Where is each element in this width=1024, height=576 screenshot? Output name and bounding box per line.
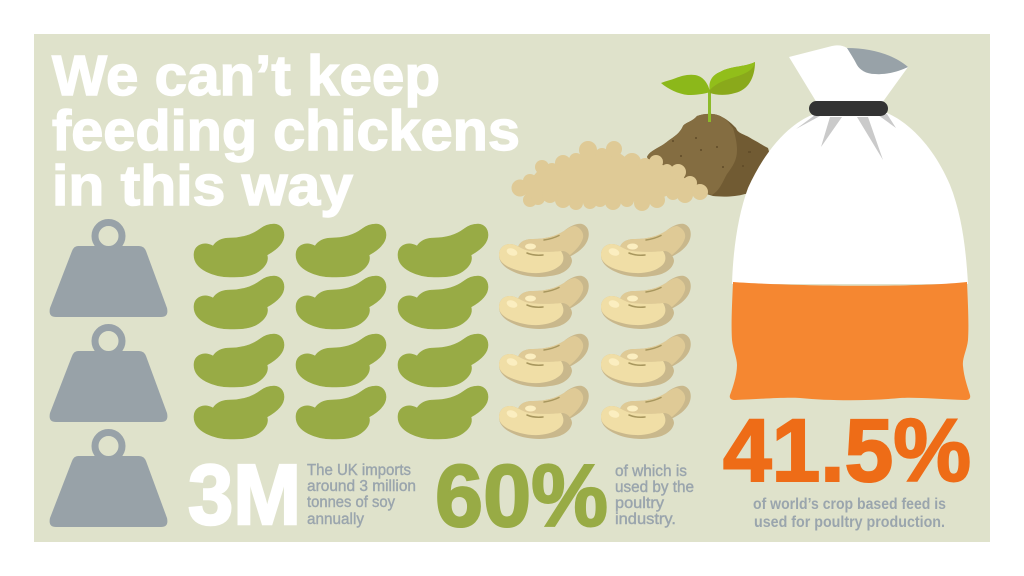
- title: in this way: [52, 154, 353, 218]
- icon: feed sack: [730, 45, 970, 400]
- text: poultry industry share: of which is: [615, 463, 687, 480]
- title: We can’t keep: [52, 44, 440, 108]
- text: poultry industry share: used by the: [615, 479, 694, 496]
- text: UK imports: tonnes of soy: [307, 494, 395, 511]
- sack tie: [809, 101, 888, 116]
- icon grid: pale soybeans: [499, 224, 691, 439]
- sack top: [789, 45, 908, 103]
- text: UK imports: around 3 million: [307, 478, 416, 495]
- weight 3: [50, 432, 167, 527]
- weight 2: [50, 328, 167, 422]
- title: [52, 44, 520, 218]
- sack fill level orange: [730, 282, 970, 400]
- text: world crop based feed: [753, 496, 946, 531]
- text: world crop based feed: of world’s crop based feed is: [753, 496, 946, 513]
- title: feeding chickens: [52, 99, 520, 163]
- soil: [647, 114, 780, 197]
- text: UK imports: [307, 462, 416, 528]
- text: poultry industry share: poultry: [615, 495, 664, 512]
- icon: pile of ground soy: [512, 141, 708, 211]
- sack body: [732, 113, 968, 284]
- text: UK imports: The UK imports: [307, 462, 411, 479]
- seedling: [661, 62, 755, 122]
- text: UK imports: annually: [307, 511, 364, 528]
- text: world crop based feed: used for poultry production.: [754, 514, 945, 531]
- sack fold: [847, 48, 908, 74]
- icon grid: green soybeans: [194, 224, 488, 439]
- stat: 41.5%: 41.5%: [723, 400, 971, 500]
- sack wrinkles: [796, 114, 896, 160]
- text: poultry industry share: industry.: [615, 511, 676, 528]
- stat: 60%: 60%: [435, 446, 608, 545]
- icon: weights: [50, 222, 167, 527]
- icon: soil mound with seedling: [647, 62, 780, 197]
- text: poultry industry share: [615, 463, 694, 528]
- weight 1: [50, 222, 167, 317]
- stat: 3M: 3M: [188, 448, 301, 543]
